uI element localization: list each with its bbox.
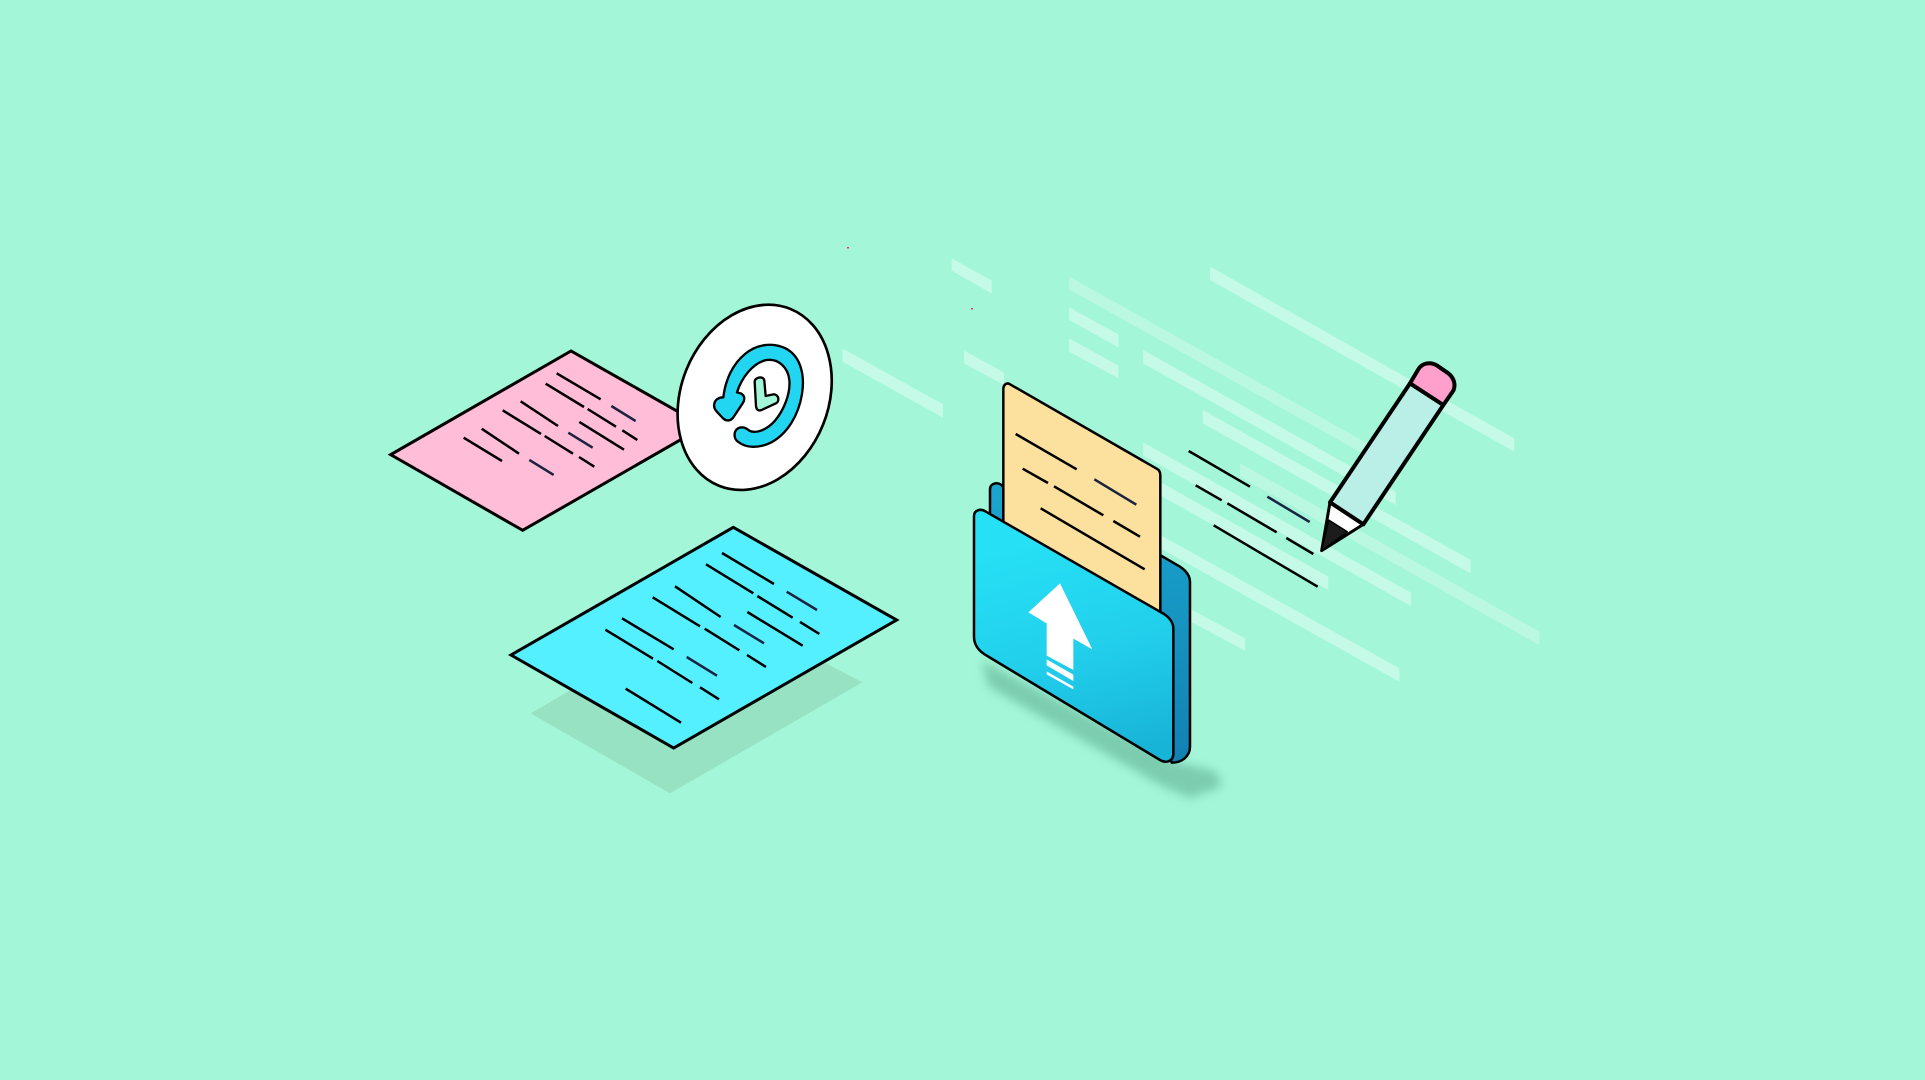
writing lines: [1189, 451, 1318, 587]
folder front pocket: [974, 510, 1173, 762]
pink document text lines: [464, 373, 637, 475]
blue document: [511, 527, 897, 748]
icon: upload arrow: [1028, 583, 1092, 689]
background diagonal stripes: [842, 258, 1539, 682]
folder back: [990, 483, 1190, 763]
icon: clock hands: [755, 377, 778, 410]
stray pink dot: [971, 308, 973, 310]
paper text lines: [1016, 434, 1145, 569]
folder: [974, 383, 1190, 763]
paper sheet: [1003, 383, 1160, 623]
pink document: [391, 351, 704, 530]
blue document shadow: [531, 658, 862, 793]
blue document text lines: [605, 553, 819, 723]
pencil tip: [1322, 502, 1363, 551]
pencil body: [1330, 383, 1443, 524]
stray pink dot: [847, 247, 849, 248]
pencil: [1322, 363, 1454, 551]
pencil eraser: [1410, 363, 1454, 405]
icon: circular history arrow: [714, 345, 803, 447]
clock badge: [651, 281, 859, 513]
folder shadow: [982, 660, 1222, 798]
